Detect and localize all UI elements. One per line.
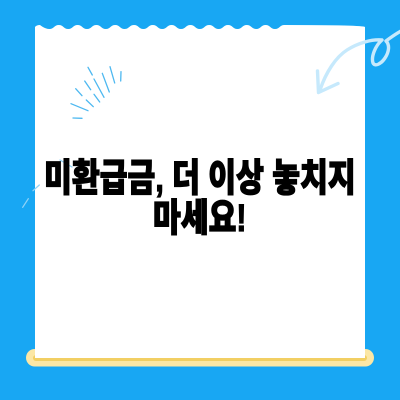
decorative light strokes lower left xyxy=(23,160,72,207)
icon: sparkle rays xyxy=(71,67,121,118)
title xyxy=(44,158,356,240)
white scalloped card xyxy=(35,25,365,358)
arrow: curled light-blue arrow xyxy=(318,31,400,92)
text: 마세요! xyxy=(153,198,247,240)
text: 미환급금, 더 이상 놓치지 xyxy=(44,158,356,200)
yellow bar under card xyxy=(26,349,374,366)
